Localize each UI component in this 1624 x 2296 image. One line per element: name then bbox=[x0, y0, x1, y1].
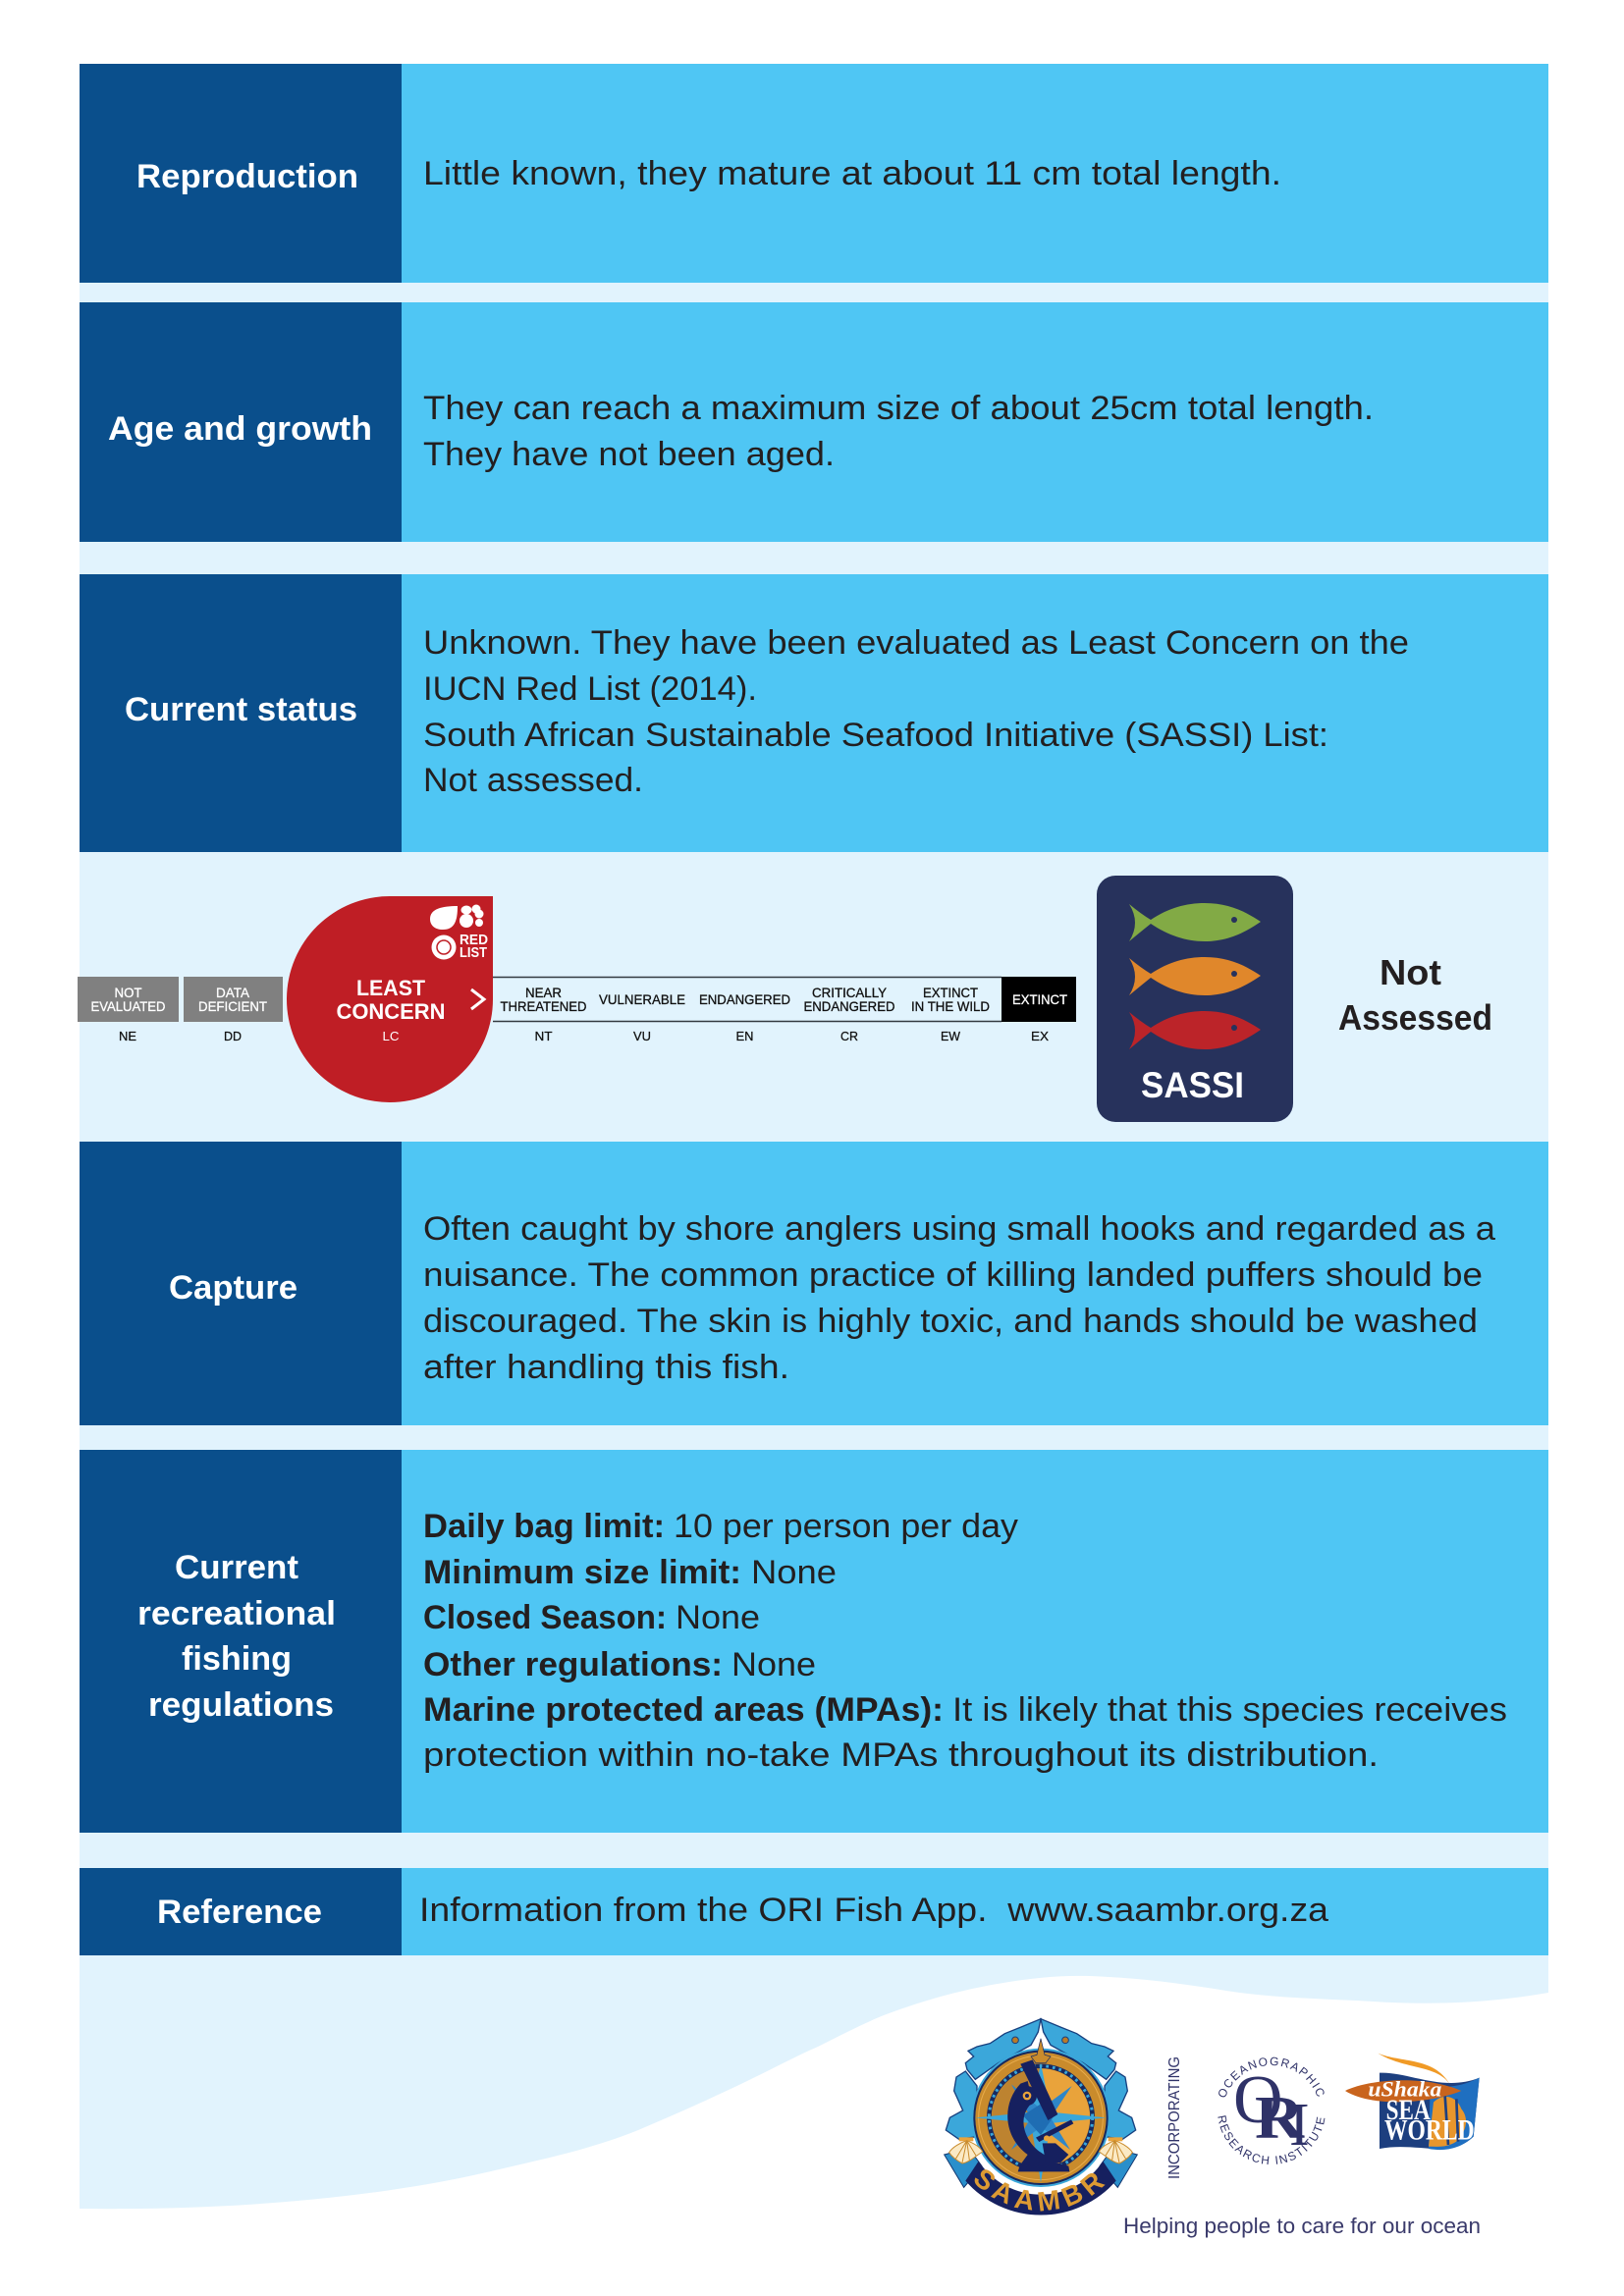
scale strip: CR bbox=[840, 1030, 858, 1043]
least concern red marker: CONCERN bbox=[336, 999, 446, 1024]
heading: current status: Current status bbox=[125, 691, 357, 728]
heading: regulations: fishing bbox=[182, 1640, 292, 1678]
icon: ORI logo: I bbox=[1289, 2092, 1310, 2159]
data deficient box bbox=[184, 977, 283, 1043]
not evaluated box: NE bbox=[119, 1030, 136, 1043]
icon: ORI logo bbox=[1218, 2057, 1326, 2164]
compass medallion bbox=[971, 2049, 1110, 2187]
text: not assessed bbox=[1338, 952, 1492, 1038]
icon: chevron bbox=[471, 989, 484, 1009]
text: regulations bbox=[423, 1508, 1507, 1774]
icon: red list logo: RED bbox=[460, 932, 488, 948]
scale strip: NEAR bbox=[525, 985, 562, 1000]
icon: ORI logo: O bbox=[1233, 2062, 1283, 2138]
text: regulations: Closed Season: bbox=[423, 1599, 667, 1636]
heading: regulations bbox=[137, 1549, 336, 1724]
text: regulations: Marine protected areas (MPAs): bbox=[423, 1691, 944, 1729]
icon: SASSI logo: SASSI bbox=[1141, 1065, 1244, 1105]
heading: capture: Capture bbox=[169, 1269, 298, 1307]
scale strip: VU bbox=[633, 1030, 651, 1043]
text: reproduction: Little known, they mature at about 11 cm total length. bbox=[423, 155, 1281, 192]
green fish bbox=[1129, 903, 1261, 941]
icon: red list logo bbox=[430, 905, 488, 961]
scale strip: CRITICALLY bbox=[812, 985, 888, 1000]
text: regulations: 10 per person per day bbox=[674, 1508, 1018, 1545]
text: current status: IUCN Red List (2014). bbox=[423, 670, 757, 708]
panel: capture bbox=[80, 1142, 1548, 1425]
scale strip: EN bbox=[736, 1030, 754, 1043]
text: regulations: None bbox=[676, 1599, 760, 1636]
heading: age and growth: Age and growth bbox=[108, 410, 372, 448]
scale strip: EXTINCT bbox=[923, 985, 978, 1000]
fleur bbox=[1031, 2039, 1051, 2063]
scale strip: ENDANGERED bbox=[803, 998, 895, 1014]
scale strip: NT bbox=[534, 1030, 553, 1043]
least concern red marker bbox=[287, 896, 493, 1102]
heading: reference: Reference bbox=[157, 1894, 322, 1931]
least concern red marker: LC bbox=[383, 1030, 399, 1043]
scale strip: EW bbox=[941, 1030, 960, 1043]
text: reference: Information from the ORI Fish App. www.saambr.org.za bbox=[419, 1892, 1328, 1929]
text: age and growth: They can reach a maximum size of about 25cm total length. bbox=[423, 390, 1374, 427]
panel: current status bbox=[80, 574, 1548, 852]
data deficient box: DD bbox=[224, 1030, 242, 1043]
text: capture bbox=[423, 1210, 1495, 1386]
text: not assessed: Assessed bbox=[1338, 997, 1492, 1038]
scale strip: THREATENED bbox=[501, 998, 587, 1014]
scale strip: IN THE WILD bbox=[911, 998, 990, 1014]
text: regulations: Other regulations: bbox=[423, 1646, 723, 1683]
data deficient box: DATA bbox=[216, 985, 250, 1000]
heading: regulations: regulations bbox=[148, 1686, 334, 1724]
text: regulations: Daily bag limit: bbox=[423, 1508, 665, 1545]
text: not assessed: Not bbox=[1380, 952, 1441, 992]
compass star bbox=[975, 2063, 1107, 2182]
text: tagline: Helping people to care for our ocean bbox=[1123, 2214, 1481, 2238]
text: regulations: None bbox=[731, 1646, 816, 1683]
shells bbox=[949, 2137, 1132, 2163]
banner bbox=[965, 2162, 1116, 2216]
panel: age and growth bbox=[80, 302, 1548, 542]
icon: ORI logo: OCEANOGRAPHIC bbox=[1218, 2057, 1325, 2097]
heading: regulations: Current bbox=[175, 1549, 298, 1586]
icon: uShaka Sea World logo: uShaka bbox=[1368, 2077, 1441, 2102]
scale strip bbox=[493, 977, 1076, 1043]
icon: SAAMBR logo: SAAMBR bbox=[974, 2169, 1106, 2212]
scale strip: ENDANGERED bbox=[699, 991, 790, 1007]
scale strip: VULNERABLE bbox=[599, 991, 685, 1007]
least concern red marker: LEAST bbox=[356, 976, 426, 1000]
text: regulations: None bbox=[751, 1554, 837, 1591]
text: age and growth bbox=[423, 390, 1374, 473]
scale strip: EXTINCT bbox=[1012, 991, 1067, 1007]
text: regulations: It is likely that this species receives bbox=[952, 1691, 1507, 1729]
icon: ORI logo: R bbox=[1255, 2085, 1305, 2152]
icon: uShaka Sea World logo: SEA bbox=[1386, 2095, 1431, 2126]
icon: uShaka Sea World logo bbox=[1345, 2054, 1480, 2150]
ribbons bbox=[945, 2148, 982, 2187]
text: capture: Often caught by shore anglers using small hooks and regarded as a bbox=[423, 1210, 1495, 1248]
data deficient box: DEFICIENT bbox=[198, 998, 267, 1014]
heading: regulations: recreational bbox=[137, 1595, 336, 1632]
red fish bbox=[1129, 1011, 1261, 1049]
icon: uShaka Sea World logo: WORLD bbox=[1384, 2114, 1475, 2146]
not evaluated box: EVALUATED bbox=[90, 998, 165, 1014]
text: current status: Unknown. They have been evaluated as Least Concern on the bbox=[423, 624, 1409, 662]
text: capture: nuisance. The common practice of killing landed puffers should be bbox=[423, 1256, 1483, 1294]
dolphins bbox=[946, 2019, 1136, 2139]
panel: reference bbox=[80, 1868, 1548, 1955]
text: current status: Not assessed. bbox=[423, 762, 643, 799]
microscope bbox=[1007, 2059, 1073, 2171]
orange fish bbox=[1129, 957, 1261, 995]
icon: red list logo: LIST bbox=[460, 944, 487, 961]
not evaluated box: NOT bbox=[114, 985, 142, 1000]
panel: regulations bbox=[80, 1450, 1548, 1833]
text: capture: after handling this fish. bbox=[423, 1349, 789, 1386]
text: incorporating: INCORPORATING bbox=[1166, 2056, 1183, 2179]
icon: SAAMBR logo bbox=[943, 2018, 1138, 2215]
icon: ORI logo: RESEARCH INSTITUTE bbox=[1218, 2115, 1326, 2164]
panel: IUCN red list scale bbox=[78, 896, 1076, 1102]
panel: reproduction bbox=[80, 64, 1548, 283]
text: regulations: protection within no-take MPAs throughout its distribution. bbox=[423, 1736, 1379, 1774]
text: current status bbox=[423, 624, 1409, 799]
text: capture: discouraged. The skin is highly toxic, and hands should be washed bbox=[423, 1303, 1478, 1340]
not evaluated box bbox=[78, 977, 179, 1043]
scale strip: EX bbox=[1031, 1030, 1050, 1043]
heading: reproduction: Reproduction bbox=[136, 158, 358, 195]
icon: SASSI logo bbox=[1097, 876, 1293, 1122]
text: current status: South African Sustainable Seafood Initiative (SASSI) List: bbox=[423, 717, 1328, 754]
text: age and growth: They have not been aged. bbox=[423, 436, 835, 473]
text: regulations: Minimum size limit: bbox=[423, 1554, 741, 1591]
